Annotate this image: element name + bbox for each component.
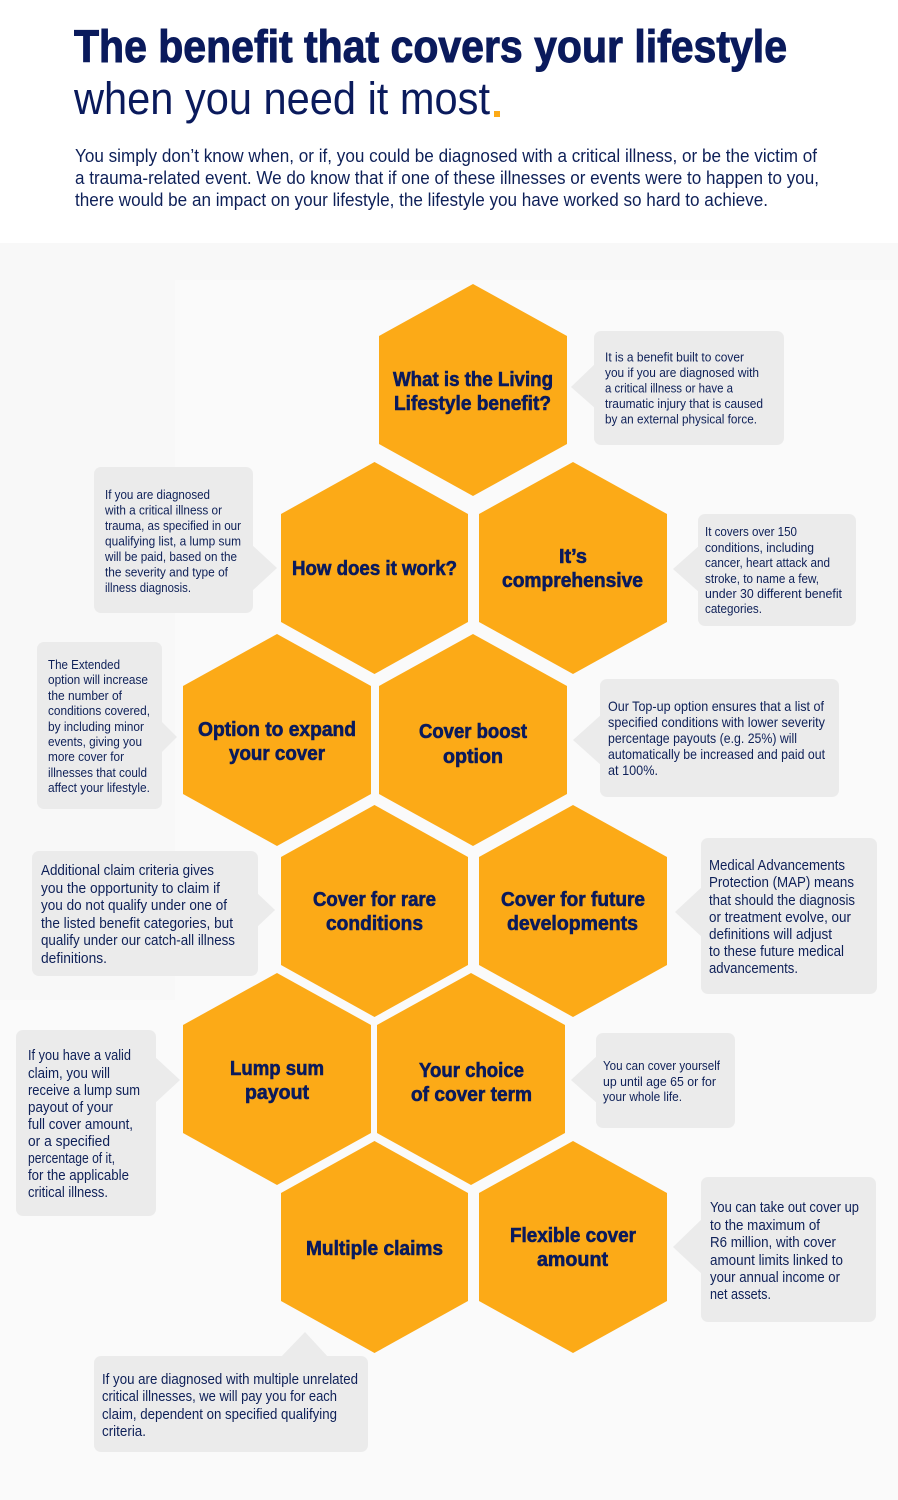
callout: lump sum payout: payout of your (28, 1100, 113, 1116)
hexagon: What is the Living Lifestyle benefit?: Lifestyle benefit? (394, 393, 551, 415)
intro text: a trauma-related event. We do know that if one of these illnesses or events were to happen to you, (75, 168, 819, 188)
intro text: You simply don’t know when, or if, you could be diagnosed with a critical illness, or be the victim of (75, 146, 818, 166)
callout: medical advancements protection: definitions will adjust (709, 927, 832, 943)
callout: lump sum payout: full cover amount, (28, 1117, 133, 1133)
callout: comprehensive: categories. (705, 601, 762, 616)
hexagon: Lump sum payout (183, 973, 371, 1185)
callout: extended option: events, giving you (48, 734, 142, 749)
hexagon: Cover boost option: Cover boost (419, 721, 527, 743)
callout: lump sum payout: claim, you will (28, 1066, 110, 1082)
callout: additional claim criteria: qualify under our catch-all illness (41, 933, 235, 949)
callout: medical advancements protection (675, 838, 877, 994)
title (73, 21, 787, 124)
callout: medical advancements protection: to these future medical (709, 944, 844, 960)
callout: flexible cover amount: amount limits linked to (710, 1253, 843, 1269)
callout: comprehensive: conditions, including (705, 540, 814, 555)
hexagon: What is the Living Lifestyle benefit? (379, 284, 567, 496)
callout: extended option (37, 642, 177, 809)
title: The benefit that covers your lifestyle (74, 21, 787, 72)
callout: how it works (94, 467, 277, 613)
hexagon: Multiple claims (281, 1141, 468, 1353)
hexagon: Cover for future developments (479, 805, 667, 1017)
callout: how it works: will be paid, based on the (104, 549, 237, 564)
callout: medical advancements protection: or treatment evolve, our (709, 910, 851, 926)
callout: extended option: option will increase (48, 672, 148, 687)
callout: flexible cover amount: R6 million, with cover (710, 1235, 836, 1251)
callout: additional claim criteria: definitions. (41, 951, 107, 967)
callout: extended option: conditions covered, (48, 703, 150, 718)
callout: lump sum payout: percentage of it, (28, 1151, 115, 1167)
callout: cover term: up until age 65 or for (603, 1074, 717, 1089)
hexagon: Lump sum payout: Lump sum (230, 1058, 324, 1080)
hexagon: Cover for future developments: Cover for future (501, 889, 645, 911)
hexagon: How does it work?: How does it work? (292, 558, 457, 580)
callout: additional claim criteria: the listed benefit categories, but (41, 916, 233, 932)
hexagon: It's comprehensive (479, 462, 667, 674)
hexagon: Cover boost option: option (443, 746, 503, 768)
callout: medical advancements protection: that should the diagnosis (709, 893, 855, 909)
callout: comprehensive: stroke, to name a few, (705, 571, 819, 586)
callout: extended option: affect your lifestyle. (48, 780, 150, 795)
callout: multiple claims: If you are diagnosed with multiple unrelated (102, 1372, 358, 1388)
callout: lump sum payout: for the applicable (28, 1168, 129, 1184)
callout: additional claim criteria: you the opportunity to claim if (41, 881, 221, 897)
hexagon: Your choice of cover term: Your choice (419, 1060, 524, 1082)
callout: medical advancements protection: Medical Advancements (709, 858, 845, 874)
callout: cover term: You can cover yourself (603, 1058, 720, 1073)
callout: multiple claims (94, 1332, 368, 1452)
callout: top-up option: automatically be increased and paid out (608, 746, 825, 762)
callout: top-up option: at 100%. (608, 762, 658, 778)
callout: additional claim criteria: you do not qualify under one of (41, 898, 228, 914)
callout: top-up option (573, 679, 839, 797)
callout: how it works: If you are diagnosed (105, 487, 210, 502)
callout: how it works: illness diagnosis. (105, 580, 191, 595)
hexagon: It's comprehensive: It’s (559, 546, 587, 568)
callout: how it works: qualifying list, a lump sum (105, 534, 241, 548)
callout: flexible cover amount: net assets. (710, 1287, 771, 1303)
hexagon: Multiple claims: Multiple claims (306, 1238, 443, 1260)
callout: medical advancements protection: advancements. (709, 961, 798, 977)
callout: what is the benefit: a critical illness or have a (605, 380, 734, 396)
callout: what is the benefit: It is a benefit built to cover (605, 350, 745, 364)
hexagon: Flexible cover amount: Flexible cover (510, 1225, 636, 1247)
hexagon: Cover boost option (379, 634, 567, 846)
intro text: there would be an impact on your lifestyle, the lifestyle you have worked so hard to achieve. (75, 190, 768, 210)
callout: how it works: the severity and type of (105, 564, 228, 580)
hexagon: It's comprehensive: comprehensive (502, 570, 643, 592)
hexagon: Flexible cover amount (479, 1141, 667, 1353)
hexagon: How does it work? (281, 462, 468, 674)
hexagon: Cover for rare conditions: Cover for rare (313, 889, 436, 911)
callout: top-up option: specified conditions with lower severity (608, 714, 825, 730)
hexagon: Cover for rare conditions: conditions (326, 913, 423, 935)
callout: multiple claims: critical illnesses, we will pay you for each (102, 1389, 337, 1405)
callout: multiple claims: claim, dependent on specified qualifying (102, 1407, 337, 1423)
callout: flexible cover amount (673, 1177, 876, 1322)
callout: additional claim criteria: Additional claim criteria gives (41, 863, 214, 879)
callout: cover term: your whole life. (603, 1089, 682, 1104)
title: when you need it most (73, 73, 490, 124)
callout: multiple claims: criteria. (102, 1424, 146, 1440)
callout: additional claim criteria (32, 851, 275, 976)
callout: extended option: The Extended (48, 657, 120, 672)
hexagon: Your choice of cover term (377, 973, 565, 1185)
intro text (75, 146, 819, 210)
callout: top-up option: Our Top-up option ensures that a list of (608, 698, 824, 714)
hexagon: Your choice of cover term: of cover term (411, 1084, 532, 1106)
callout: top-up option: percentage payouts (e.g. 25%) will (608, 730, 797, 746)
callout: lump sum payout: If you have a valid (28, 1048, 131, 1064)
callout: flexible cover amount: to the maximum of (710, 1218, 821, 1234)
callout: how it works: trauma, as specified in our (105, 518, 242, 533)
callout: what is the benefit: you if you are diagnosed with (605, 365, 759, 380)
callout: comprehensive: under 30 different benefit (705, 586, 842, 601)
callout: lump sum payout: receive a lump sum (28, 1083, 140, 1099)
callout: extended option: by including minor (48, 719, 145, 734)
callout: extended option: the number of (48, 688, 122, 703)
callout: lump sum payout (16, 1030, 180, 1216)
hexagon: Flexible cover amount: amount (537, 1249, 608, 1271)
hexagon: Option to expand your cover (183, 634, 371, 846)
callout: comprehensive: It covers over 150 (705, 524, 797, 539)
callout: medical advancements protection: Protection (MAP) means (709, 875, 854, 891)
callout: flexible cover amount: You can take out cover up (710, 1200, 859, 1216)
callout: comprehensive: cancer, heart attack and (705, 555, 830, 570)
callout: what is the benefit (571, 331, 784, 445)
callout: lump sum payout: or a specified (28, 1134, 110, 1150)
hexagon: What is the Living Lifestyle benefit?: What is the Living (393, 369, 553, 391)
hexagon: Lump sum payout: payout (245, 1082, 309, 1104)
hexagon: Option to expand your cover: Option to expand (198, 719, 356, 741)
callout: lump sum payout: critical illness. (28, 1185, 108, 1201)
callout: what is the benefit: by an external physical force. (605, 412, 757, 426)
callout: extended option: more cover for (48, 749, 125, 764)
hexagon: Cover for future developments: developments (507, 913, 638, 935)
hexagon: Option to expand your cover: your cover (229, 743, 325, 765)
callout: what is the benefit: traumatic injury that is caused (605, 396, 763, 411)
callout: extended option: illnesses that could (48, 765, 147, 780)
hexagon: Cover for rare conditions (281, 805, 468, 1017)
callout: comprehensive (673, 514, 856, 626)
callout: cover term (571, 1033, 735, 1128)
callout: flexible cover amount: your annual income or (710, 1270, 840, 1286)
callout: how it works: with a critical illness or (104, 502, 223, 518)
